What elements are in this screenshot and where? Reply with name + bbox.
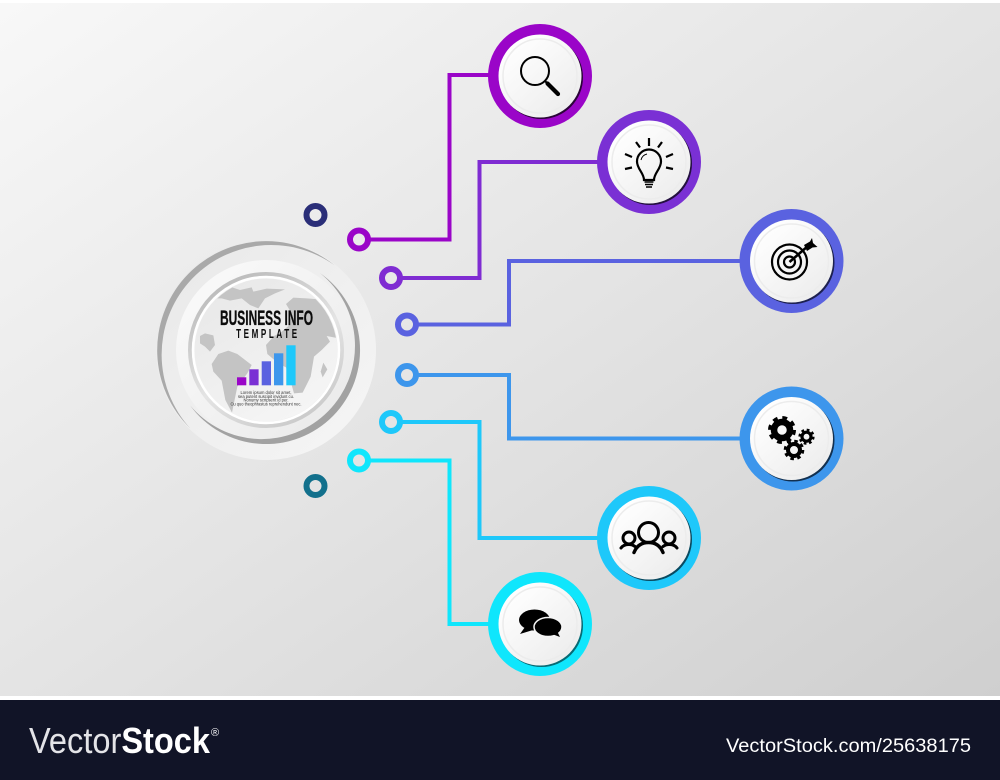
icon: target with arrow <box>772 238 818 280</box>
icon: gears <box>770 418 813 459</box>
decorative dot: navy <box>306 206 324 224</box>
footer logo: VectorStock <box>29 720 211 761</box>
connector 5 <box>382 413 600 538</box>
footer bar <box>0 700 1000 780</box>
central globe badge <box>156 240 376 460</box>
inner grey crescent <box>190 273 360 444</box>
lorem text block <box>230 390 302 406</box>
inner disc <box>176 260 356 440</box>
world map <box>200 287 339 413</box>
registered mark: ® <box>211 727 219 739</box>
bar chart <box>237 345 296 385</box>
lorem text block: Lorem ipsum dolor sit amet, <box>240 390 292 395</box>
node: settings <box>740 386 844 490</box>
node: target <box>740 209 844 313</box>
outer grey crescent <box>157 241 335 428</box>
connector 3 <box>398 261 744 334</box>
connector 4 <box>398 366 744 438</box>
connector 6 <box>350 452 492 624</box>
node: idea <box>597 110 701 214</box>
connector 1 <box>350 75 492 248</box>
icon: light bulb <box>625 138 673 187</box>
outer halo <box>156 240 376 460</box>
node: search <box>488 24 592 128</box>
top edge strip <box>0 0 1000 3</box>
node: chat <box>488 572 592 676</box>
icon: magnifier <box>521 57 558 94</box>
lorem text block: Nonumy scripserit id per. <box>244 398 288 403</box>
subtitle: TEMPLATE <box>236 327 297 342</box>
title: BUSINESS INFO <box>220 307 313 330</box>
node: team <box>597 486 701 590</box>
icon: people <box>621 522 677 552</box>
lorem text block: Cu quo theophrastus reprehendunt nec. <box>230 401 302 406</box>
bevel ring <box>190 274 342 426</box>
connector 2 <box>382 162 600 287</box>
footer image id: VectorStock.com/25638175 <box>726 735 971 757</box>
icon: speech bubbles <box>519 610 562 637</box>
lorem text block: sea putent suscipit invidunt cu. <box>238 394 294 399</box>
decorative dot: teal <box>306 477 324 495</box>
